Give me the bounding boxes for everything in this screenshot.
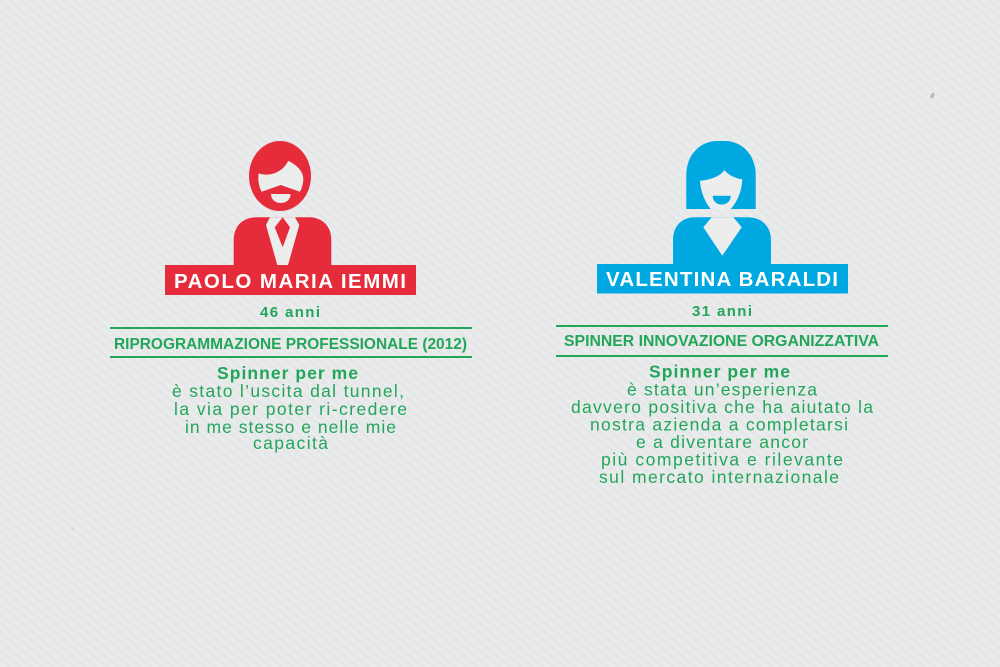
testimonial text: la via per poter ri-credere <box>174 399 407 419</box>
testimonial text: Spinner per me <box>217 363 358 383</box>
testimonial text: è stato l’uscita dal tunnel, <box>172 381 404 401</box>
panel: Valentina Baraldi <box>556 141 888 487</box>
testimonial text <box>571 362 873 487</box>
icon: woman <box>673 141 771 264</box>
testimonial text: capacità <box>253 433 328 453</box>
programme heading: SPINNER INNOVAZIONE ORGANIZZATIVA <box>564 333 879 350</box>
testimonial text: Spinner per me <box>649 362 790 382</box>
panel: Paolo Maria Iemmi <box>110 141 472 453</box>
name banner: VALENTINA BARALDI <box>606 268 838 291</box>
age: 46 anni <box>260 304 320 321</box>
name banner: PAOLO MARIA IEMMI <box>174 270 406 293</box>
testimonial text: nostra azienda a completarsi <box>590 414 848 434</box>
programme heading: RIPROGRAMMAZIONE PROFESSIONALE (2012) <box>114 336 467 353</box>
testimonial text: davvero positiva che ha aiutato la <box>571 397 873 417</box>
icon: bearded man <box>234 141 331 265</box>
testimonial text: più competitiva e rilevante <box>601 450 843 470</box>
testimonial text <box>172 363 407 453</box>
testimonial text: e a diventare ancor <box>636 432 808 452</box>
testimonial text: sul mercato internazionale <box>599 467 839 487</box>
testimonial text: è stata un’esperienza <box>627 380 817 400</box>
testimonial text: in me stesso e nelle mie <box>185 417 396 437</box>
age: 31 anni <box>692 303 752 320</box>
